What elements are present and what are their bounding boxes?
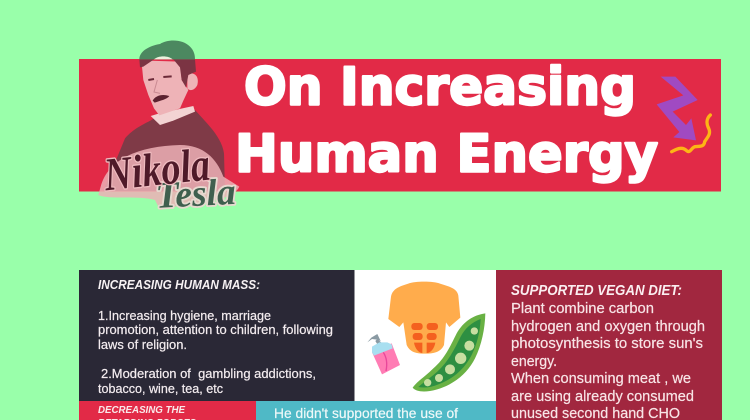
title banner bbox=[79, 59, 721, 192]
heading: INCREASING HUMAN MASS: bbox=[98, 278, 260, 292]
lettering: Tesla: Tesla bbox=[155, 172, 237, 217]
list text: 2.Moderation of gambling addictions, bbox=[101, 367, 316, 381]
ear bbox=[187, 73, 198, 90]
list text bbox=[98, 309, 333, 396]
list text: 1.Increasing hygiene, marriage bbox=[98, 309, 271, 323]
panel: increasing human mass bbox=[79, 270, 354, 401]
icon: purple lightning arrow bbox=[657, 77, 698, 140]
icon: Nikola Tesla portrait bbox=[98, 41, 239, 217]
icon: yellow squiggle bbox=[672, 115, 710, 152]
body text: are using already consumed bbox=[511, 389, 694, 405]
collar bbox=[151, 106, 195, 125]
panel: decreasing the retarding forces bbox=[79, 401, 256, 420]
nose shade bbox=[154, 80, 160, 93]
panel: illustrations bbox=[354, 270, 496, 401]
hair below banner edge bbox=[139, 59, 196, 87]
highlight bbox=[154, 56, 173, 59]
moustache bbox=[153, 95, 169, 103]
title bbox=[235, 58, 658, 184]
panel: teal note bbox=[256, 401, 496, 420]
jacket bbox=[103, 110, 225, 191]
title: On Increasing bbox=[244, 58, 636, 118]
lettering: Nikola: Nikola bbox=[101, 139, 212, 201]
list text: laws of religion. bbox=[98, 338, 187, 352]
icon: torso bbox=[388, 282, 460, 354]
icon: soap bottle bbox=[367, 334, 400, 374]
body text: photosynthesis to store sun's bbox=[511, 336, 703, 352]
face bbox=[142, 61, 188, 115]
eyes bbox=[148, 76, 172, 80]
body text bbox=[511, 301, 705, 420]
icon: pea pod bbox=[413, 313, 485, 392]
lettering backing glow bbox=[98, 145, 239, 210]
list text: tobacco, wine, tea, etc bbox=[98, 382, 223, 396]
body text: hydrogen and oxygen through bbox=[511, 319, 705, 335]
body text: energy. bbox=[511, 354, 557, 370]
title: Human Energy bbox=[235, 124, 658, 184]
body text: Plant combine carbon bbox=[511, 301, 654, 317]
body text: When consuming meat , we bbox=[511, 371, 691, 387]
panel: supported vegan diet bbox=[496, 270, 722, 420]
heading: SUPPORTED VEGAN DIET: bbox=[511, 283, 682, 299]
list text: promotion, attention to children, following bbox=[98, 323, 333, 337]
hair above banner edge bbox=[139, 41, 195, 59]
panel: decreasing the retarding forces: DECREASING THE bbox=[98, 405, 186, 416]
